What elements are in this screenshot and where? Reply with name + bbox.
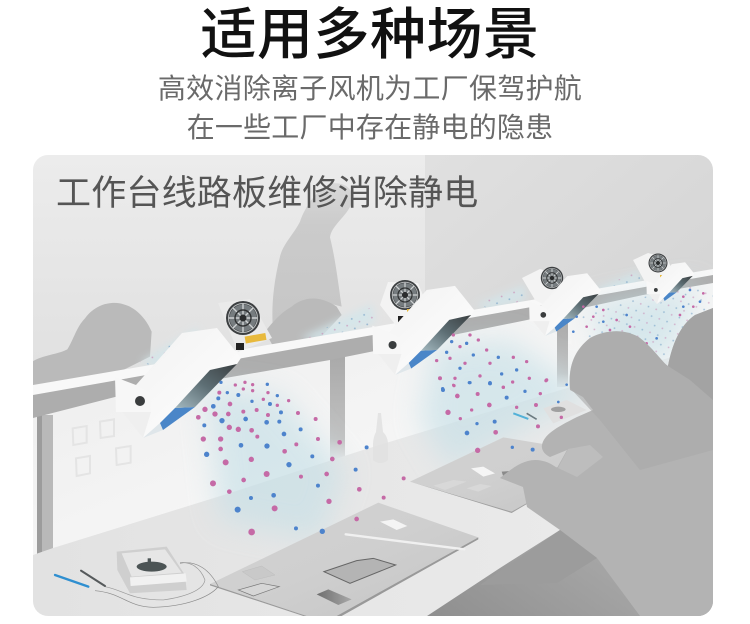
ions: main stream blue <box>202 381 369 534</box>
device: ionizer 2 <box>372 280 474 375</box>
back wall <box>33 155 713 370</box>
stylus <box>346 534 464 549</box>
rail <box>33 269 713 418</box>
device: ionizer 3 <box>522 267 601 336</box>
bottle <box>373 413 388 447</box>
ions: second stream magenta <box>382 379 563 500</box>
device: ionizer 1 <box>115 299 272 438</box>
second work mat <box>410 438 567 513</box>
stippled ions in the far stream <box>575 285 713 365</box>
mat corner under hand <box>558 445 603 477</box>
background silhouettes behind rail <box>33 298 342 385</box>
air mist under ionizers <box>205 285 700 540</box>
back air mist <box>140 270 640 368</box>
stippled small ions behind rail <box>140 270 640 368</box>
front desk edge <box>427 530 713 616</box>
white pad <box>380 519 407 530</box>
ions: second stream blue <box>441 381 568 452</box>
panel heading: 工作台线路板维修消除静电 <box>56 174 478 213</box>
positive and negative ions <box>196 289 710 535</box>
grey pad <box>317 589 352 605</box>
subtitle line 2: 在一些工厂中存在静电的隐患 <box>187 112 553 143</box>
ions: upper stream magenta <box>435 292 710 389</box>
background worker silhouette <box>272 183 352 325</box>
ionizer on desk with cable and tweezers <box>55 547 218 607</box>
flat chip <box>238 583 279 596</box>
faint wall squares <box>73 419 131 476</box>
title: 适用多种场景 <box>200 3 540 66</box>
subtitle line 1: 高效消除离子风机为工厂保驾护航 <box>158 73 582 104</box>
small square chip <box>242 566 275 580</box>
panel: workbench scene <box>33 155 713 616</box>
foreground worker silhouette <box>500 308 713 616</box>
desk surface <box>33 358 670 616</box>
large chip <box>324 558 396 583</box>
desk shadow <box>480 530 597 585</box>
ions: main stream magenta <box>196 381 362 535</box>
ions: upper stream blue <box>441 289 705 390</box>
front right head shading <box>668 308 713 400</box>
rail posts <box>37 318 568 555</box>
small ionizer and tools in background <box>513 400 587 423</box>
main work mat <box>210 503 478 616</box>
worker head shading <box>570 331 668 411</box>
glass partition <box>33 275 713 555</box>
device: ionizer 4 <box>633 253 694 304</box>
